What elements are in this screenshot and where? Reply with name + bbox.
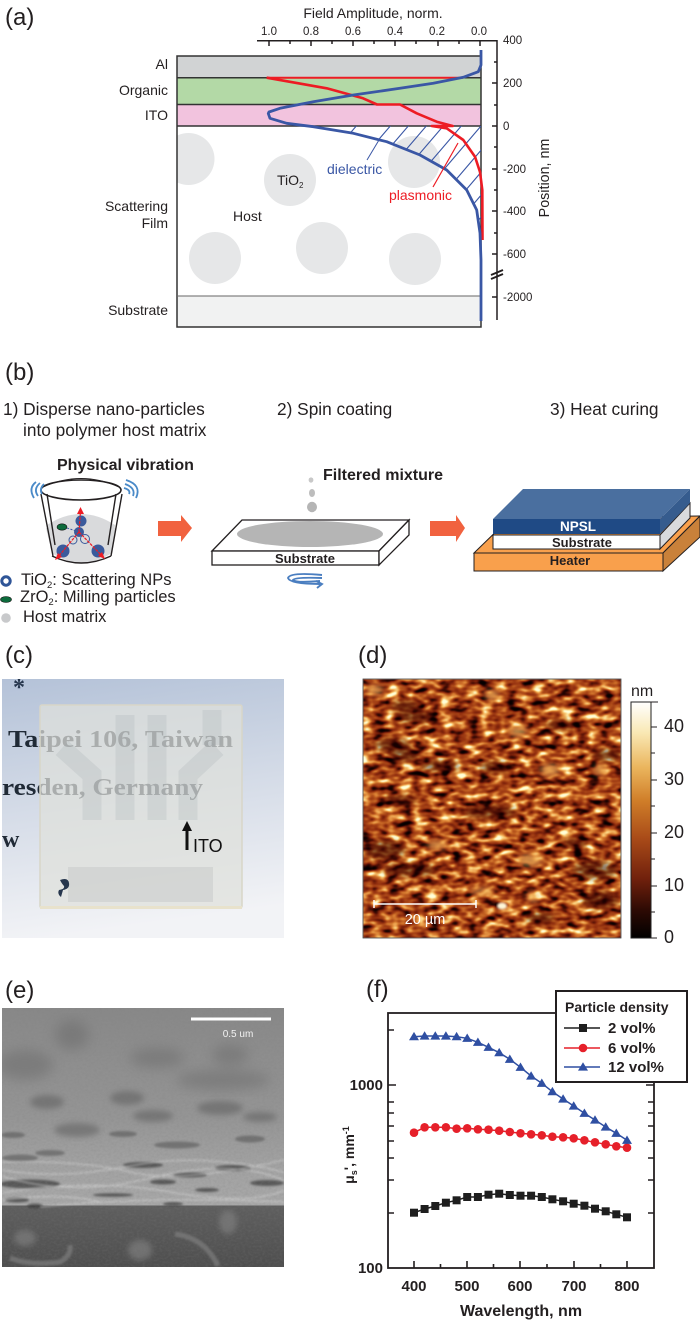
- layer labels: [105, 56, 168, 318]
- axis tick labels: 800: [614, 1278, 640, 1295]
- legend: particle density: 2 vol%: [608, 1020, 656, 1037]
- right axis: position: -600: [503, 249, 526, 261]
- colour bar: 10: [664, 875, 684, 895]
- y axis title: s: [349, 1170, 359, 1175]
- text: TiO2: 2: [299, 181, 304, 190]
- icon: heater stack: Heater: [550, 553, 590, 568]
- top axis: field amplitude: [257, 5, 497, 46]
- top axis: field amplitude: 0.8: [303, 26, 319, 38]
- legend: materials: [0, 571, 176, 626]
- text: substrate: Substrate: [275, 551, 335, 566]
- step 1 heading: [3, 399, 207, 440]
- icon: spin coating substrate: [212, 477, 409, 565]
- axis tick labels: 600: [507, 1278, 533, 1295]
- layer labels: ITO: [145, 107, 168, 123]
- axis tick labels: 1000: [350, 1077, 383, 1094]
- legend: materials: Host matrix: [23, 608, 107, 626]
- legend: materials: TiO: [21, 571, 47, 589]
- photo: [2, 675, 284, 938]
- right axis: position: -200: [503, 164, 526, 176]
- series: 6 vol%: [410, 1123, 631, 1152]
- layer: Organic: [177, 78, 481, 104]
- layer labels: Al: [156, 56, 168, 72]
- arrow: step 2 to 3: [430, 515, 465, 542]
- top axis: field amplitude: 1.0: [261, 26, 277, 38]
- colour bar: 30: [664, 769, 684, 789]
- colour bar: 0: [664, 927, 674, 947]
- axis tick labels: 100: [358, 1260, 383, 1277]
- callout: ITO arrow: [182, 821, 223, 856]
- callout: ITO arrow: ITO: [193, 836, 223, 856]
- label (a): (a): [5, 4, 34, 31]
- top axis: field amplitude: 0.6: [345, 26, 361, 38]
- label (d): (d): [358, 642, 387, 669]
- x axis title: Wavelength, nm: [460, 1303, 582, 1320]
- series: 2 vol%: [410, 1190, 631, 1221]
- legend: materials: 2: [47, 580, 52, 591]
- axis tick labels: 500: [454, 1278, 480, 1295]
- top axis: field amplitude: 0.4: [387, 26, 404, 38]
- top axis: field amplitude: Field Amplitude, norm.: [303, 5, 443, 21]
- icon: vibrating cup: [31, 478, 138, 563]
- stack frame and dividers: [177, 56, 481, 327]
- right axis: position: Position, nm: [537, 139, 553, 217]
- axis tick labels: 400: [401, 1278, 427, 1295]
- photo: Taipei 106, Taiwan: [8, 727, 233, 753]
- layer: ITO: [177, 104, 481, 126]
- scale bar: 20 µm: 20 µm: [405, 912, 445, 928]
- panel c: photo of device: [2, 642, 284, 938]
- plot frame and ticks: [388, 1013, 654, 1268]
- step 3 heading: 3) Heat curing: [550, 399, 659, 419]
- curve: plasmonic: [267, 78, 482, 240]
- y axis title: -1: [341, 1126, 351, 1134]
- SEM micrograph: [0, 1008, 284, 1267]
- icon: heater stack: NPSL: [560, 519, 596, 534]
- right axis: position: -2000: [503, 292, 532, 304]
- scale bar: 20 µm: [374, 900, 476, 928]
- colour bar: [631, 683, 684, 947]
- label (b): (b): [5, 359, 34, 386]
- panel b: fabrication process: [0, 359, 700, 626]
- y axis title: ', mm: [341, 1134, 357, 1170]
- colour bar: 40: [664, 716, 684, 736]
- legend: materials: ZrO: [20, 588, 48, 606]
- layer labels: Film: [142, 215, 168, 231]
- text: TiO2: TiO: [277, 172, 299, 188]
- step 2 heading: 2) Spin coating: [277, 399, 392, 419]
- scale bar: 0.5 um: 0.5 um: [223, 1029, 253, 1040]
- panel a: field amplitude over device stack: [5, 4, 553, 327]
- photo: w: [2, 827, 20, 853]
- right axis: position: -400: [503, 206, 526, 218]
- photo: resden, Germany: [2, 775, 203, 801]
- layer labels: Organic: [119, 82, 168, 98]
- scale bar: 0.5 um: [191, 1018, 271, 1040]
- AFM image: [363, 679, 621, 938]
- y axis title: μ: [341, 1175, 357, 1184]
- layer labels: Substrate: [108, 302, 168, 318]
- axis tick labels: 700: [561, 1278, 587, 1295]
- layer: scattering film with TiO2 particles: [162, 133, 441, 285]
- top axis: field amplitude: 0.2: [429, 26, 445, 38]
- series: 12 vol%: [409, 1031, 632, 1144]
- colour bar: 20: [664, 822, 684, 842]
- legend: materials: : Milling particles: [54, 588, 176, 606]
- label (c): (c): [5, 642, 33, 669]
- layer: Al: [177, 56, 481, 78]
- panel e: SEM image: [0, 977, 284, 1267]
- icon: heater stack: [474, 489, 700, 571]
- right axis: position: 200: [503, 78, 522, 90]
- curve: dielectric: [268, 50, 481, 321]
- pointer: dielectric: [367, 140, 379, 160]
- layer labels: Scattering: [105, 198, 168, 214]
- panel f: scattering coefficient chart: [341, 976, 687, 1320]
- text: filtered mixture: Filtered mixture: [323, 467, 443, 484]
- text: dielectric: dielectric: [327, 161, 382, 177]
- legend: particle density: 12 vol%: [608, 1059, 664, 1076]
- label (f): (f): [366, 976, 389, 1003]
- right axis: position: [491, 35, 553, 320]
- icon: heater stack: Substrate: [552, 535, 612, 550]
- right axis: position: 400: [503, 35, 522, 47]
- icon: spin arrow: [288, 574, 322, 588]
- right axis: position: 0: [503, 121, 509, 133]
- arrow: step 1 to 2: [158, 515, 192, 542]
- layer: Substrate: [177, 296, 481, 327]
- legend: particle density: Particle density: [565, 999, 669, 1015]
- legend: particle density: 6 vol%: [608, 1040, 656, 1057]
- legend: particle density: [556, 991, 687, 1082]
- label (e): (e): [5, 977, 34, 1004]
- legend: materials: 2: [48, 597, 54, 608]
- top axis: field amplitude: 0.0: [471, 26, 487, 38]
- legend: materials: : Scattering NPs: [52, 571, 171, 589]
- axis tick labels: [350, 1077, 640, 1295]
- text: plasmonic: plasmonic: [389, 187, 452, 203]
- colour bar: nm: [631, 683, 653, 700]
- text: physical vibration: Physical vibration: [57, 457, 194, 474]
- step 1 heading: 1) Disperse nano-particles: [3, 399, 205, 419]
- hatching between curves: [351, 126, 481, 220]
- pointer: plasmonic: [433, 143, 458, 187]
- step 1 heading: into polymer host matrix: [23, 420, 207, 440]
- text: Host: Host: [233, 208, 262, 224]
- photo: *: [13, 675, 25, 701]
- panel d: AFM map: [358, 642, 684, 947]
